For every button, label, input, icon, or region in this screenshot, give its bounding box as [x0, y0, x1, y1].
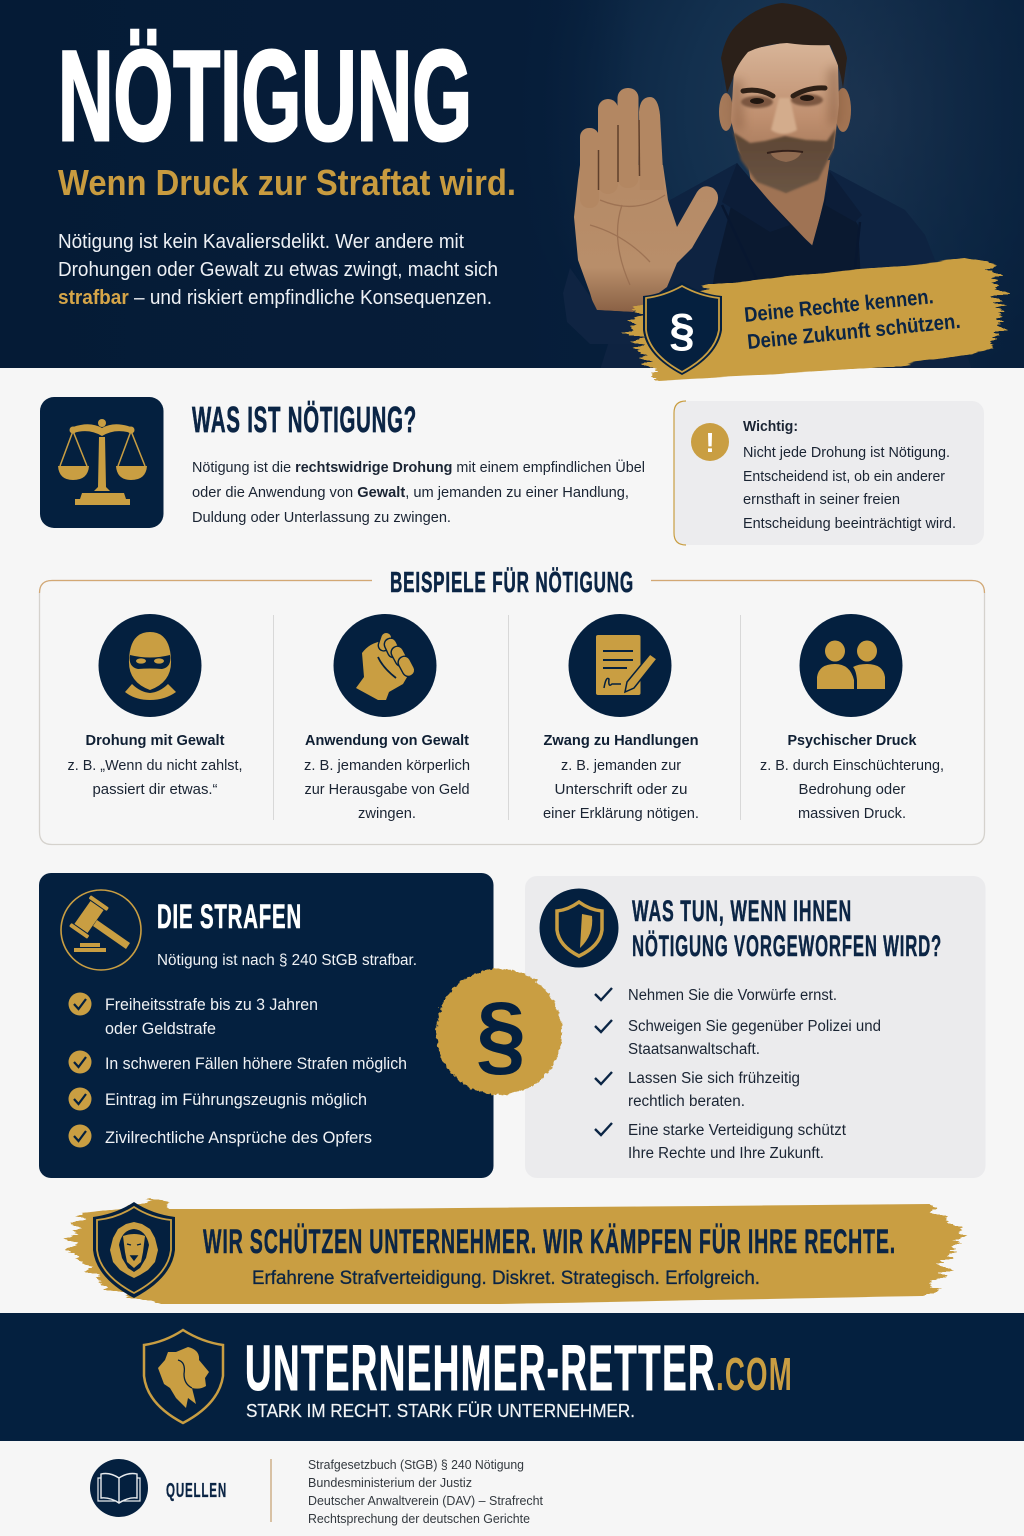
- example 4: z. B. durch Einschüchterung,: [760, 757, 944, 774]
- brand claim: STARK IM RECHT. STARK FÜR UNTERNEHMER.: [246, 1401, 635, 1421]
- intro text: Drohungen oder Gewalt zu etwas zwingt, macht sich: [58, 259, 498, 281]
- sources list: Deutscher Anwaltverein (DAV) – Strafrecht: [308, 1494, 544, 1508]
- list text: In schweren Fällen höhere Strafen möglich: [105, 1054, 407, 1073]
- hero background: [0, 0, 1024, 368]
- panel: beispiele: [40, 566, 984, 844]
- shield with paragraph sign: §: [669, 304, 695, 356]
- callout: wichtig: [674, 401, 984, 545]
- example 2: [304, 614, 470, 822]
- sources list: Strafgesetzbuch (StGB) § 240 Nötigung: [308, 1458, 524, 1472]
- subheading: Nötigung ist nach § 240 StGB strafbar.: [157, 952, 417, 969]
- example 3: [543, 614, 699, 822]
- gold brush stroke: [70, 1198, 962, 1304]
- subtitle: Wenn Druck zur Straftat wird.: [58, 162, 516, 203]
- callout text: Nicht jede Drohung ist Nötigung.: [743, 445, 950, 461]
- paragraph seal: [436, 969, 562, 1095]
- heading: [632, 895, 942, 963]
- mouth line: [767, 151, 803, 153]
- heading: WAS TUN, WENN IHNEN: [632, 895, 852, 928]
- definition text: [192, 458, 645, 526]
- definition text: Nötigung ist die rechtswidrige Drohung mit einem empfindlichen Übel: [192, 458, 645, 476]
- right ear: [835, 88, 851, 132]
- jacket: [669, 163, 914, 276]
- check icons: [68, 992, 92, 1148]
- example 1: passiert dir etwas.“: [92, 781, 218, 798]
- nose: [771, 98, 797, 134]
- icon: two people: [800, 614, 902, 717]
- shirt: [713, 192, 860, 284]
- icon: book: [90, 1459, 148, 1517]
- sources list: Bundesministerium der Justiz: [308, 1476, 472, 1490]
- brand footer: [0, 1313, 1024, 1441]
- jacket lapel lines: [721, 204, 861, 240]
- shield with paragraph sign: [643, 282, 722, 375]
- icon: exclamation mark: !: [705, 427, 715, 458]
- intro text: strafbar – und riskiert empfindliche Konsequenzen.: [58, 287, 492, 309]
- hero portrait: man with raised hand: [564, 3, 914, 344]
- example 3: einer Erklärung nötigen.: [543, 805, 699, 822]
- banner slogan: Deine Zukunft schützen.: [746, 310, 961, 354]
- example 1: [68, 614, 242, 798]
- lion mane inner: [119, 1229, 149, 1272]
- eyebrows: [743, 88, 825, 96]
- list text: Freiheitsstrafe bis zu 3 Jahren: [105, 995, 318, 1014]
- example 4: Bedrohung oder: [798, 781, 906, 798]
- heading: BEISPIELE FÜR NÖTIGUNG: [390, 566, 634, 599]
- list text: [105, 995, 407, 1147]
- example 3: Unterschrift oder zu: [554, 781, 688, 798]
- panel frame: [40, 580, 984, 844]
- palm creases: [590, 195, 665, 285]
- list text: Eintrag im Führungszeugnis möglich: [105, 1090, 367, 1109]
- face: [731, 43, 839, 160]
- check marks: [595, 988, 612, 1135]
- list text: Zivilrechtliche Ansprüche des Opfers: [105, 1128, 372, 1147]
- lion features: [127, 1244, 141, 1260]
- left ear: [719, 93, 733, 131]
- eye sockets: [741, 94, 823, 108]
- brand domain: .COM: [716, 1348, 793, 1400]
- sources list: [308, 1458, 544, 1526]
- hair: [721, 3, 847, 93]
- lion mane: [110, 1222, 158, 1278]
- icon: scales of justice: [40, 397, 164, 528]
- panel: die strafen: [39, 873, 494, 1178]
- example 4: [760, 614, 944, 822]
- callout text: Entscheidung beeinträchtigt wird.: [743, 516, 956, 532]
- hand palm: [574, 165, 718, 312]
- definition text: Duldung oder Unterlassung zu zwingen.: [192, 509, 451, 526]
- finger gaps: [598, 120, 640, 190]
- mouth area: [770, 150, 802, 162]
- beard: [733, 128, 836, 193]
- heading: WAS IST NÖTIGUNG?: [192, 399, 417, 440]
- example text: Psychischer Druck: [788, 732, 917, 749]
- example text: Anwendung von Gewalt: [305, 732, 469, 749]
- intro text: [58, 231, 498, 309]
- hand fingers: [580, 88, 663, 165]
- gold brush stroke: [632, 258, 1000, 381]
- example 4: massiven Druck.: [798, 805, 906, 822]
- shirt collar: [722, 164, 862, 221]
- intro text: Nötigung ist kein Kavaliersdelikt. Wer andere mit: [58, 231, 464, 253]
- advice text: Eine starke Verteidigung schützt: [628, 1122, 847, 1139]
- banner slogan: [743, 285, 961, 354]
- icon: fist: [334, 614, 436, 717]
- example text: Drohung mit Gewalt: [86, 732, 225, 749]
- paragraph seal: §: [476, 985, 526, 1085]
- banner subline: Erfahrene Strafverteidigung. Diskret. Strategisch. Erfolgreich.: [252, 1268, 760, 1289]
- penalties list: [68, 992, 407, 1148]
- example 2: zwingen.: [358, 805, 416, 822]
- example 3: z. B. jemanden zur: [561, 757, 681, 774]
- callout text: Wichtig:: [743, 419, 798, 435]
- hero brush banner: [632, 258, 1000, 381]
- lion face: [123, 1234, 145, 1268]
- icon: shield: [540, 888, 618, 968]
- example 1: z. B. „Wenn du nicht zahlst,: [68, 757, 242, 774]
- example 2: z. B. jemanden körperlich: [304, 757, 470, 774]
- list text: oder Geldstrafe: [105, 1019, 216, 1038]
- section: was ist nötigung: [192, 399, 645, 526]
- lion head profile: [158, 1347, 209, 1408]
- advice text: Staatsanwaltschaft.: [628, 1041, 760, 1058]
- icon: gavel: [61, 890, 141, 970]
- callout text: [743, 419, 956, 532]
- sources list: Rechtsprechung der deutschen Gerichte: [308, 1512, 530, 1526]
- definition text: oder die Anwendung von Gewalt, um jemanden zu einer Handlung,: [192, 484, 629, 501]
- example text: Zwang zu Handlungen: [544, 732, 698, 749]
- heading: DIE STRAFEN: [157, 898, 302, 936]
- logo: lion shield: [144, 1330, 223, 1423]
- icon: shield with lion: [93, 1202, 175, 1298]
- callout text: Entscheidend ist, ob ein anderer: [743, 469, 945, 485]
- example 2: zur Herausgabe von Geld: [304, 781, 470, 798]
- advice text: Lassen Sie sich frühzeitig: [628, 1070, 800, 1087]
- panel: was tun: [525, 876, 986, 1178]
- advice text: rechtlich beraten.: [628, 1093, 745, 1110]
- icon: exclamation mark: [691, 423, 729, 461]
- advice text: Schweigen Sie gegenüber Polizei und: [628, 1018, 881, 1035]
- title: NÖTIGUNG: [58, 25, 472, 168]
- advice text: Nehmen Sie die Vorwürfe ernst.: [628, 987, 837, 1004]
- neck: [748, 160, 830, 246]
- face shading: [731, 65, 840, 130]
- sources: [90, 1458, 544, 1526]
- icon: masked person: [98, 614, 202, 717]
- advice text: [628, 987, 881, 1162]
- banner slogan: Deine Rechte kennen.: [743, 285, 935, 327]
- eyes: [750, 95, 814, 104]
- hero header: [0, 0, 1024, 370]
- sleeve: [564, 269, 634, 344]
- gold banner: [70, 1198, 962, 1304]
- sources heading: QUELLEN: [166, 1480, 227, 1502]
- advice text: Ihre Rechte und Ihre Zukunft.: [628, 1145, 824, 1162]
- icon: signed document: [568, 614, 672, 717]
- callout text: ernsthaft in seiner freien: [743, 492, 900, 508]
- lion mane line: [178, 1360, 192, 1388]
